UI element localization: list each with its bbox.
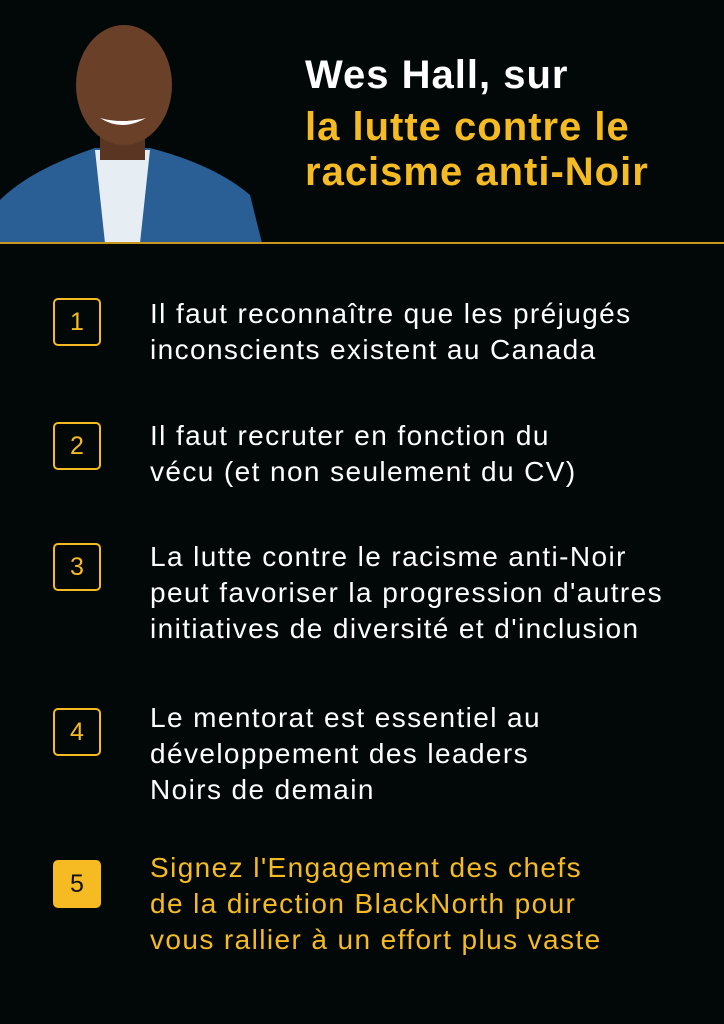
item 5: 5	[70, 870, 84, 898]
item 2: vécu (et non seulement du CV)	[150, 456, 577, 487]
item 3	[53, 541, 663, 644]
item 4: développement des leaders	[150, 738, 529, 769]
head	[76, 25, 172, 145]
item 1: Il faut reconnaître que les préjugés	[150, 298, 632, 329]
item 5	[53, 852, 602, 955]
shirt	[95, 150, 150, 243]
item 3: peut favoriser la progression d'autres	[150, 577, 663, 608]
item 4: 4	[70, 718, 84, 746]
neck	[100, 125, 145, 160]
item 4	[53, 702, 541, 805]
item 2	[53, 420, 577, 487]
title: racisme anti-Noir	[305, 150, 649, 194]
item 1: inconscients existent au Canada	[150, 334, 597, 365]
item 1	[53, 298, 632, 365]
portrait illustration	[0, 25, 262, 242]
title	[305, 53, 649, 194]
item 3: 3	[70, 553, 84, 581]
jacket	[0, 148, 262, 243]
item 3: La lutte contre le racisme anti-Noir	[150, 541, 627, 572]
item 4: Noirs de demain	[150, 774, 375, 805]
item 2: 2	[70, 432, 84, 460]
item 5: vous rallier à un effort plus vaste	[150, 924, 602, 955]
item 2: Il faut recruter en fonction du	[150, 420, 550, 451]
item 5: Signez l'Engagement des chefs	[150, 852, 582, 883]
item 4: Le mentorat est essentiel au	[150, 702, 541, 733]
item 5: de la direction BlackNorth pour	[150, 888, 576, 919]
title: Wes Hall, sur	[305, 53, 568, 97]
item 1: 1	[70, 308, 84, 336]
title: la lutte contre le	[305, 105, 630, 149]
item 3: initiatives de diversité et d'inclusion	[150, 613, 640, 644]
